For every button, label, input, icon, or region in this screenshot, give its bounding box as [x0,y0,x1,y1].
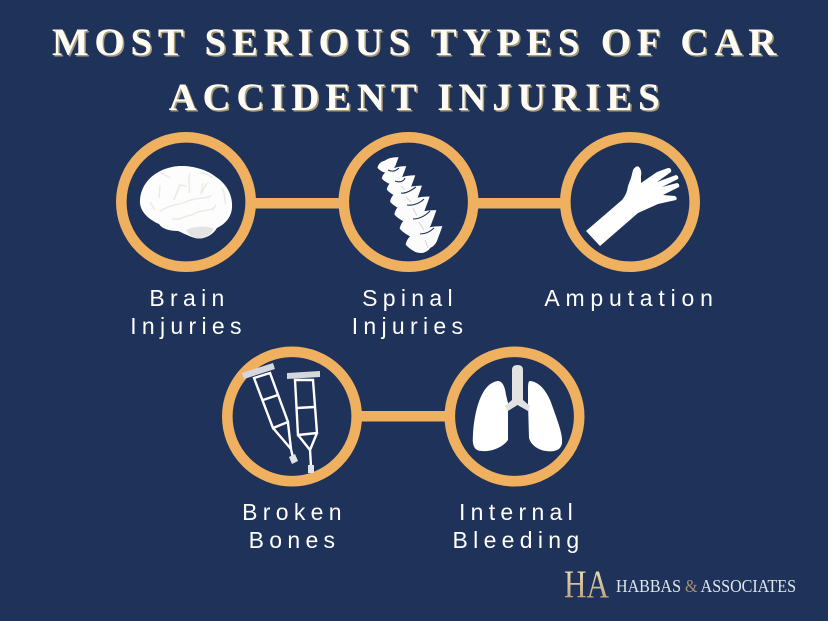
connector: spine to amputation [472,198,566,208]
title [52,21,784,120]
icon: lungs [473,365,562,451]
label: spinal injuries [352,285,468,339]
icon: amputated arm [586,166,679,246]
label: brain injuries: Brain [149,285,230,311]
label: internal bleeding [453,499,584,553]
ring: crutches [227,352,357,481]
label: spinal injuries: Injuries [352,313,468,339]
label: internal bleeding: Internal [459,499,578,525]
ring: hand [565,137,695,267]
logo mark: HA monogram: HA [564,563,609,606]
panel: spinal injuries [344,137,473,339]
ring: lungs [450,352,579,481]
label: broken bones: Bones [249,527,340,553]
logo wordmark: HABBAS & ASSOCIATES [616,576,796,596]
label: spinal injuries: Spinal [362,285,458,311]
icon: spine [377,157,442,253]
logo: Habbas & Associates [564,563,796,606]
ring: spine [344,137,473,267]
icon: crutches [242,363,320,473]
panel: brain injuries [121,137,251,339]
title: ACCIDENT INJURIES [169,76,665,119]
panel: internal bleeding [450,352,584,553]
label: broken bones: Broken [242,499,347,525]
title: ACCIDENT INJURIES [170,78,667,120]
label: brain injuries [130,285,247,339]
label: internal bleeding: Bleeding [453,527,584,553]
panel: broken bones [227,352,357,553]
label: amputation: Amputation [544,285,719,311]
ring: brain [121,137,251,267]
label: broken bones [242,499,347,553]
connector: broken bones to internal bleeding [356,411,451,422]
panel: amputation [544,137,719,311]
title: MOST SERIOUS TYPES OF CAR [53,22,784,66]
title: MOST SERIOUS TYPES OF CAR [52,21,782,64]
label: brain injuries: Injuries [130,313,247,339]
icon: brain [140,166,232,239]
connector: brain to spine [250,198,345,208]
